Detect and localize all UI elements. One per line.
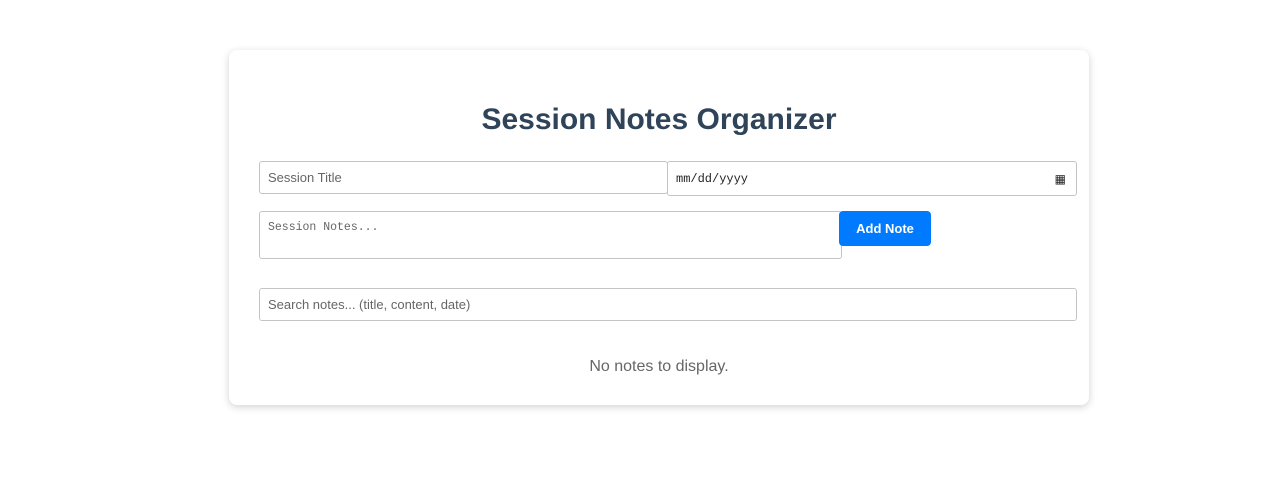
input: date [667, 161, 1077, 196]
button: add note [839, 211, 931, 246]
input: session title [259, 161, 668, 194]
input: search [259, 288, 1077, 321]
textarea: session notes: Session Notes... [268, 221, 378, 234]
empty state text: No notes to display. [589, 358, 729, 375]
title: Session Notes Organizer [481, 103, 837, 136]
input: search: Search notes... (title, content, date) [268, 297, 470, 312]
input: date: mm/dd/yyyy [676, 172, 748, 186]
panel: card [229, 50, 1089, 405]
input: session title: Session Title [268, 170, 342, 185]
textarea: session notes [259, 211, 842, 259]
input: date: ▦ [1055, 172, 1066, 186]
button: add note: Add Note [856, 221, 914, 236]
